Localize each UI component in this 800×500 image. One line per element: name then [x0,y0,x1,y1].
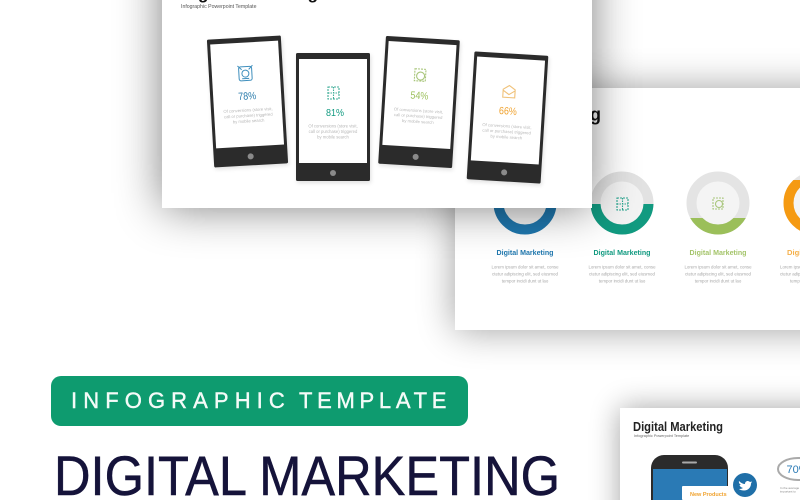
phone 4 caption: Of conversions (store visit, [482,122,532,130]
circle labels: Digital Marketing [690,248,747,257]
popup card: New Products [690,492,727,498]
phone mockup [651,455,729,500]
circle descriptions: ctetur adipiscing elit, sed eiusmod [685,272,751,276]
phone 2 caption: call or purchase) triggered [309,129,358,134]
circle descriptions: tempor incidi dunt ut lao [502,278,549,284]
phone 1: blue: 78% [238,90,257,103]
phone 3 caption [393,106,444,125]
circle chart: blue [494,208,556,234]
percent ring: 70%: In the average [780,486,800,490]
icon: blue outline [237,65,253,81]
circle chart: green [692,176,744,230]
percent ring: 70%: important to [780,490,796,494]
circle descriptions: ctetur adipiscing elit, sed eiusmod [589,272,655,276]
phone 3: green: 54% [410,89,429,103]
circle labels: Digital Marketing [594,248,651,257]
circle labels: Digital Marketing [496,248,554,257]
slide subheading: Infographic Powerpoint Template [634,434,689,438]
phone 3: green [378,36,461,170]
phone 2: teal [296,53,371,183]
circle descriptions: tempor incidi dunt ut lao [695,278,742,284]
circle descriptions: ctetur adipiscing elit, sed eiusmod [492,272,558,276]
phone 1 caption [223,106,274,125]
circle labels [496,248,800,257]
circle descriptions: tempor incidi dunt ut lao [599,278,646,284]
slide heading: Digital Marketing [633,420,723,434]
circle chart: teal [596,176,648,230]
icon: orange envelope [503,85,515,98]
phone 4 caption: call or purchase) triggered [482,127,532,135]
phone 2 caption: Of conversions (store visit, [308,124,358,128]
icon: teal outline [328,87,339,99]
phone 4 caption: by mobile search [490,134,523,140]
circle descriptions: Lorem ipsum dolor sit amet, conse [684,264,752,270]
phone 3 caption: Of conversions (store visit, [394,106,443,114]
slide subheading: Infographic Powerpoint Template [181,4,257,10]
phone 2 caption: by mobile search [317,134,349,140]
phone 4: orange: 66% [499,105,517,118]
phone 1 caption: Of conversions (store visit, [223,106,273,114]
phone 1: blue [207,35,289,170]
panel: circle charts slide [455,88,800,330]
circle descriptions [491,264,800,284]
phone 2: teal: 81% [326,107,344,119]
percent ring: 70% [778,458,800,494]
slide heading: digital marketing: Digital Marketing [456,104,601,124]
phone 2 caption [308,124,358,140]
panel: social media slide [620,408,800,500]
badge: infographic template [51,376,468,426]
phone 4 caption [482,122,532,141]
icon: green outline [414,69,426,81]
circle descriptions: Lorem ipsum dolor sit amet, conse [588,264,656,270]
badge: infographic template: TEMPLATE [299,388,451,413]
phone 1 caption: by mobile search [233,118,265,124]
panel: phones slide [162,0,592,208]
icon: twitter badge [733,473,757,497]
phone 4: orange [467,51,549,186]
badge: infographic template: INFOGRAPHIC [71,388,291,413]
circle chart: orange [788,176,800,230]
phone 3 caption: by mobile search [402,118,434,125]
phone 3 caption: call or purchase) triggered [394,112,443,120]
circle descriptions: Lorem ipsum dolor sit amet, conse [491,264,559,270]
phone 1 caption: call or purchase) triggered [224,112,273,119]
